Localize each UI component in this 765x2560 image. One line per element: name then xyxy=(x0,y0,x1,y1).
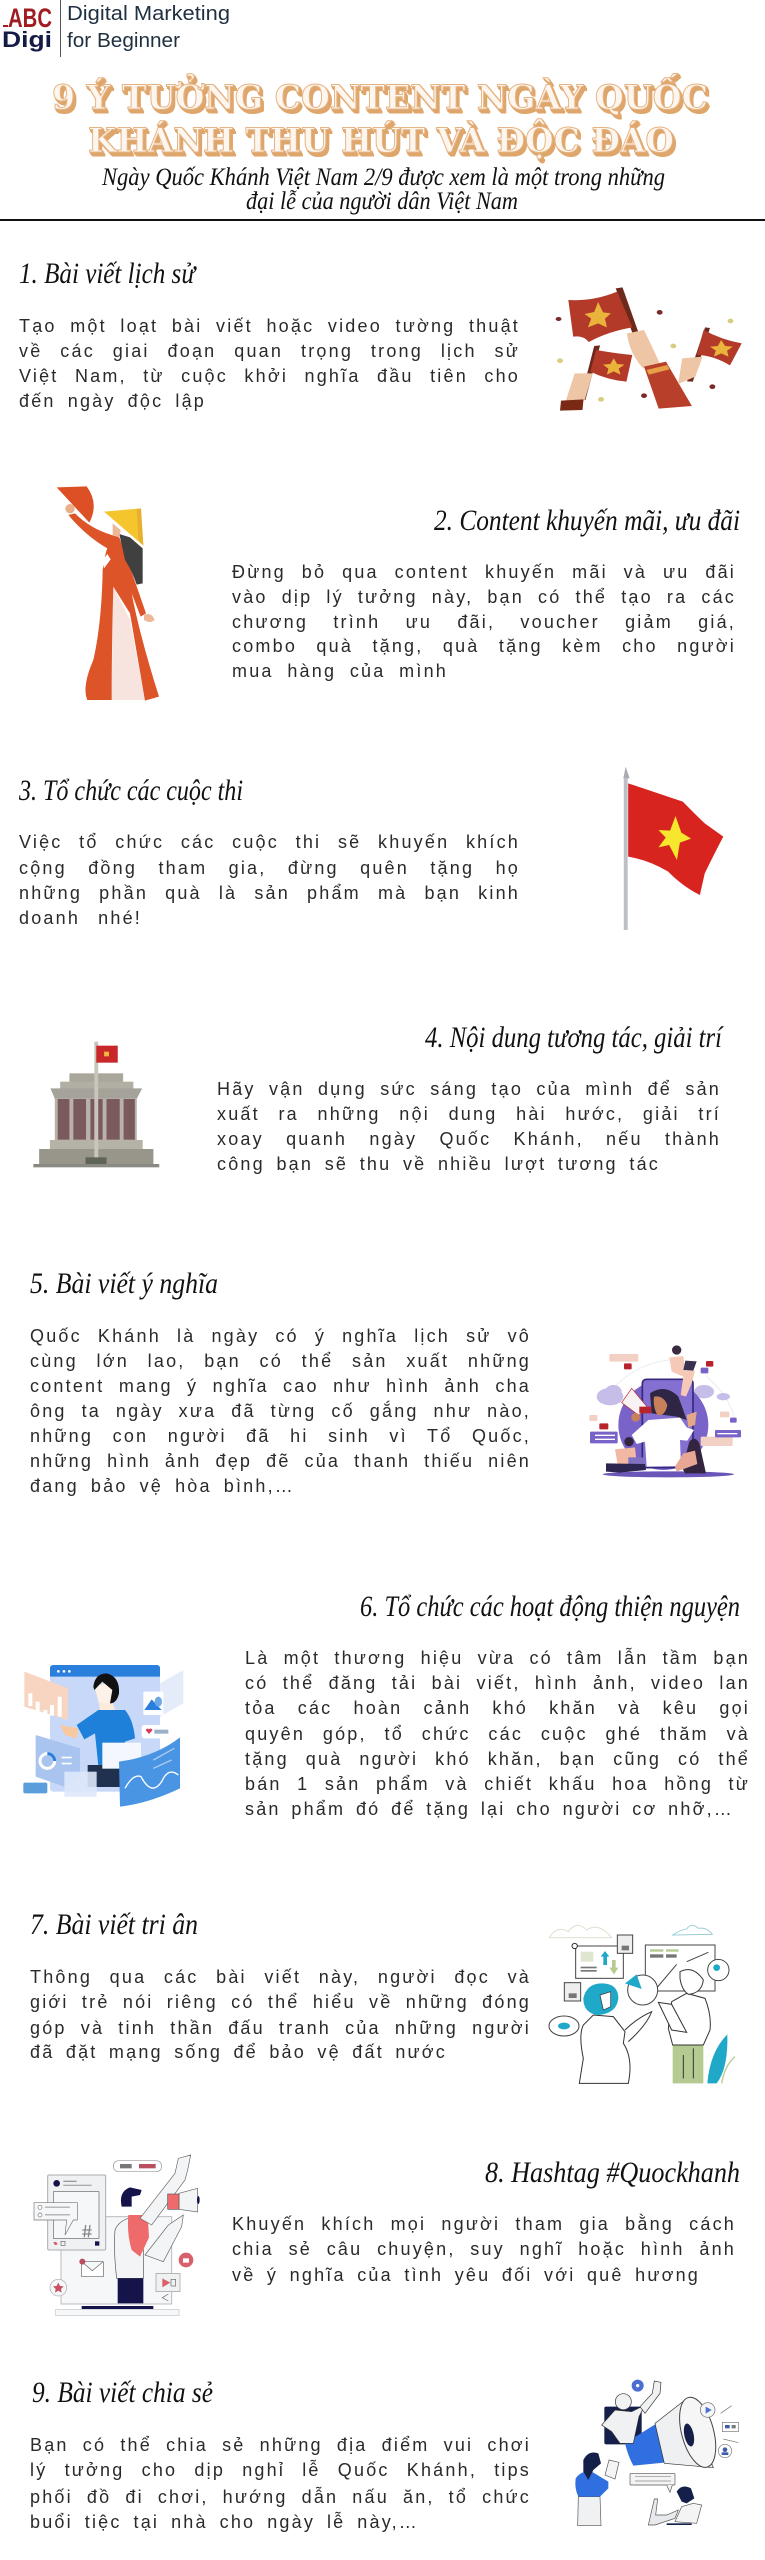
text block 4 xyxy=(217,1079,721,1174)
heading 5: 5. Bài viết ý nghĩa xyxy=(30,1267,218,1300)
text block 1: Tạo một loạt bài viết hoặc video tường thuật xyxy=(19,316,520,336)
text block 6: tặng quà người khó khăn, bạn cũng có thể xyxy=(245,1749,750,1769)
heading 1: 1. Bài viết lịch sử xyxy=(19,257,197,290)
text block 5: những hình ảnh đẹp đẽ của thanh thiếu niên xyxy=(30,1451,531,1471)
text block 2: chương trình ưu đãi, voucher giảm giá, xyxy=(232,612,736,632)
panel: 3. Tổ chức các cuộc thi xyxy=(18,766,724,930)
logo: for Beginner xyxy=(67,30,180,52)
text block 7: Thông qua các bài viết này, người đọc và xyxy=(30,1967,531,1987)
text block 3: những phần quà là sản phẩm mà bạn kinh xyxy=(19,883,520,903)
text block 6: tỏa các hoàn cảnh khó khăn và kêu gọi xyxy=(245,1698,750,1718)
text block 2: mua hàng của mình xyxy=(232,661,448,681)
text block 2: combo quà tặng, quà tặng kèm cho người xyxy=(232,636,736,656)
icon: person with dashboards xyxy=(23,1665,184,1807)
icon: Vietnam flag on pole xyxy=(623,766,724,930)
text block 6: quyên góp, tổ chức các cuộc ghé thăm và xyxy=(245,1724,750,1744)
heading 3: 3. Tổ chức các cuộc thi xyxy=(18,774,243,807)
title: 9 Ý TƯỞNG CONTENT NGÀY QUỐC xyxy=(52,73,708,118)
heading 7: 7. Bài viết tri ân xyxy=(30,1908,198,1941)
text block 8 xyxy=(232,2214,736,2285)
panel: 1. Bài viết lịch sử xyxy=(19,257,742,411)
text block 6 xyxy=(245,1648,750,1819)
icon: man with megaphone xyxy=(34,2154,200,2316)
logo xyxy=(2,0,230,57)
text block 9: Bạn có thể chia sẻ những địa điểm vui chơi xyxy=(30,2435,531,2455)
text block 3: Việc tổ chức các cuộc thi sẽ khuyến khích xyxy=(19,832,520,852)
subtitle: đại lễ của người dân Việt Nam xyxy=(246,188,518,215)
text block 4: xoay quanh ngày Quốc Khánh, nếu thành xyxy=(217,1129,721,1149)
text block 6: bán 1 sản phẩm và chiết khấu hoa hồng từ xyxy=(245,1774,750,1794)
panel: 5. Bài viết ý nghĩa xyxy=(30,1267,741,1496)
panel: 9. Bài viết chia sẻ xyxy=(30,2376,739,2532)
panel: 8. Hashtag #Quockhanh xyxy=(34,2154,740,2316)
text block 5: content mang ý nghĩa cao như hình ảnh cha xyxy=(30,1376,531,1396)
logo: Digi xyxy=(2,27,52,52)
text block 4: Hãy vận dụng sức sáng tạo của mình để sản xyxy=(217,1079,721,1099)
icon: Ho Chi Minh mausoleum xyxy=(33,1042,160,1168)
text block 1: về các giai đoạn quan trọng trong lịch sử xyxy=(19,341,520,361)
heading 9: 9. Bài viết chia sẻ xyxy=(32,2376,213,2409)
text block 3 xyxy=(19,832,520,928)
panel: 2. Content khuyến mãi, ưu đãi xyxy=(56,486,740,701)
text block 6: sản phẩm đó để tặng lại cho người cơ nhỡ,… xyxy=(245,1799,734,1819)
text block 5 xyxy=(30,1326,531,1496)
icon: woman in ao dai xyxy=(56,486,159,701)
text block 3: cộng đồng tham gia, đừng quên tặng họ xyxy=(19,858,520,878)
text block 9: buổi tiệc tại nhà cho ngày lễ này,… xyxy=(30,2512,419,2532)
logo: Digital Marketing xyxy=(67,3,230,25)
text block 8: chia sẻ câu chuyện, suy nghĩ hoặc hình ảnh xyxy=(232,2239,736,2259)
panel: 7. Bài viết tri ân xyxy=(30,1908,736,2084)
text block 2: Đừng bỏ qua content khuyến mãi và ưu đãi xyxy=(232,562,736,582)
text block 5: ông ta ngày xưa đã từng cố gắng như nào, xyxy=(30,1401,531,1421)
text block 5: Quốc Khánh là ngày có ý nghĩa lịch sử vô xyxy=(30,1326,531,1346)
icon: hands waving flags xyxy=(556,287,742,411)
text block 5: đang bảo vệ hòa bình,… xyxy=(30,1476,295,1496)
text block 5: cùng lớn lao, bạn có thể sản xuất những xyxy=(30,1351,531,1371)
text block 3: doanh nhé! xyxy=(19,908,142,928)
text block 1: Việt Nam, từ cuộc khởi nghĩa đầu tiên cho xyxy=(19,366,520,386)
text block 7: giới trẻ nói riêng có thể hiểu về những đóng xyxy=(30,1992,531,2012)
icon: giant megaphone with people xyxy=(575,2380,739,2526)
text block 1 xyxy=(19,316,520,411)
panel: 4. Nội dung tương tác, giải trí xyxy=(33,1021,724,1174)
text block 4: công bạn sẽ thu về nhiều lượt tương tác xyxy=(217,1154,660,1174)
subtitle xyxy=(101,164,665,215)
title: KHÁNH THU HÚT VÀ ĐỘC ĐÁO xyxy=(88,118,674,161)
logo: ABC xyxy=(8,3,52,33)
text block 6: có thể đăng tải bài viết, hình ảnh, video lan xyxy=(245,1673,750,1693)
header rule xyxy=(0,219,765,221)
text block 9 xyxy=(30,2435,531,2532)
text block 6: Là một thương hiệu vừa có tâm lẫn tầm bạn xyxy=(245,1648,750,1668)
text block 9: phối đồ đi chơi, hướng dẫn nấu ăn, tổ chức xyxy=(30,2487,531,2507)
title xyxy=(52,73,710,164)
subtitle: Ngày Quốc Khánh Việt Nam 2/9 được xem là một trong những xyxy=(101,164,665,191)
icon: influencer with megaphone xyxy=(589,1345,741,1478)
text block 7: đã đặt mạng sống để bảo vệ đất nước xyxy=(30,2042,447,2062)
text block 8: Khuyến khích mọi người tham gia bằng cách xyxy=(232,2214,736,2234)
text block 7 xyxy=(30,1967,531,2062)
text block 4: xuất ra những nội dung hài hước, giải trí xyxy=(217,1104,721,1124)
text block 1: đến ngày độc lập xyxy=(19,391,206,411)
text block 7: góp và tinh thần đấu tranh của những người xyxy=(30,2018,531,2038)
text block 2 xyxy=(232,562,736,681)
text block 8: về ý nghĩa của tình yêu đối với quê hương xyxy=(232,2265,700,2285)
text block 5: những con người đã hi sinh vì Tổ Quốc, xyxy=(30,1426,531,1446)
text block 9: lý tưởng cho dịp nghỉ lễ Quốc Khánh, tips xyxy=(30,2460,531,2480)
panel: 6. Tổ chức các hoạt động thiện nguyện xyxy=(23,1590,750,1819)
text block 2: vào dịp lý tưởng này, bạn có thể tạo ra các xyxy=(232,587,736,607)
icon: two people with charts xyxy=(548,1924,736,2084)
